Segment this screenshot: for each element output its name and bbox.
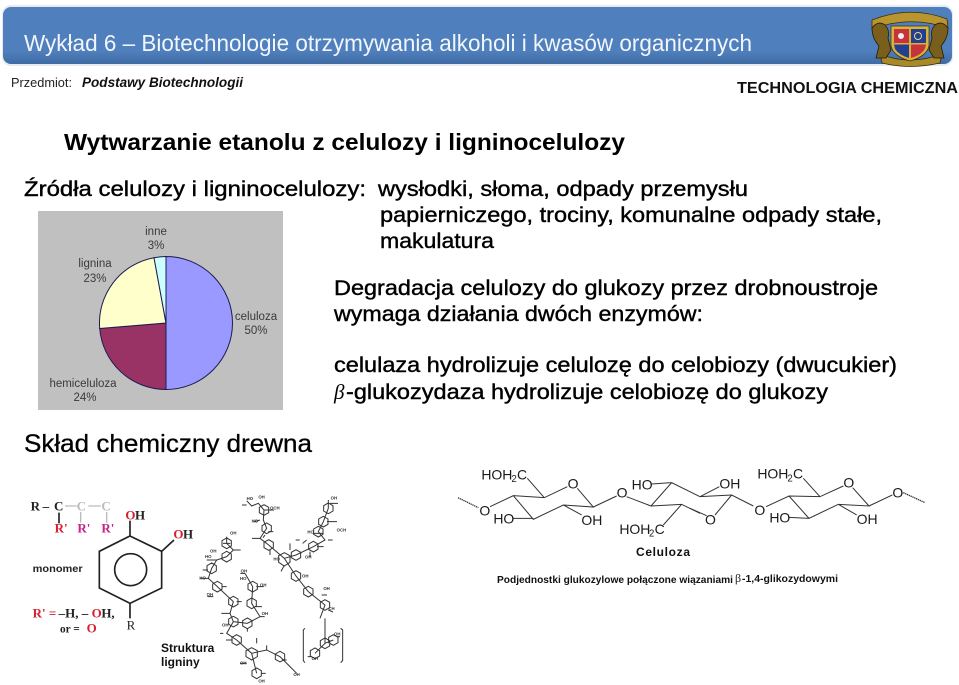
diagram: cellulose chain left part: O (617, 485, 628, 501)
text block: degradation of cellulose (333, 277, 878, 326)
lignin substituent labels: CH (328, 606, 335, 611)
lignin substituent labels: OH (258, 495, 265, 500)
lignin substituent labels: OH (293, 672, 300, 677)
pie labels (49, 226, 278, 404)
lignin substituent labels (199, 495, 346, 684)
diagram label: lignin structure: Struktura (161, 641, 215, 655)
lignin substituent labels: OH (260, 583, 266, 588)
diagram: cellulose chain right part: O (892, 484, 903, 500)
diagram: lignin monomer: R' = (33, 606, 56, 621)
text block: degradation of cellulose: wymaga działania dwóch enzymów: (333, 303, 703, 326)
diagram: lignin monomer: R' (55, 521, 68, 536)
diagram: lignin monomer: H, (101, 606, 115, 621)
diagram: lignin monomer: H (135, 507, 145, 522)
icon: university crest (872, 12, 948, 66)
text block: enzymes: -glukozydaza hydrolizuje celobiozę do glukozy (346, 381, 829, 404)
lignin substituent labels: OH (258, 679, 265, 684)
pie labels: 23% (83, 273, 107, 285)
diagram: cellulose chain left part: OH (581, 512, 602, 528)
diagram: cellulose chain left part: C (517, 466, 527, 482)
subject line (11, 75, 243, 90)
lignin substituent labels: OH (331, 495, 337, 500)
pie labels: hemiceluloza (49, 378, 117, 390)
pie chart caption: Skład chemiczny drewna (24, 430, 312, 458)
text block: degradation of cellulose: Degradacja celulozy do glukozy przez drobnoustroje (334, 277, 878, 300)
diagram: lignin monomer: C (54, 499, 63, 514)
diagram: cellulose chain left part: O (568, 476, 579, 492)
pie labels: celuloza (235, 311, 278, 323)
diagram: cellulose chain right part (690, 466, 925, 527)
diagram: cellulose chain right part: C (793, 466, 803, 482)
text block: enzymes: celulaza hydrolizuje celulozę do celobiozy (dwucukier) (334, 354, 897, 377)
diagram: cellulose chain left part: HOH (481, 466, 512, 482)
pie labels: 50% (244, 325, 268, 337)
diagram: lignin monomer (31, 499, 193, 636)
lignin substituent labels: OCH (270, 505, 280, 510)
diagram label: cellulose: Celuloza (636, 545, 690, 559)
diagram: lignin monomer: monomer (33, 564, 83, 575)
lignin substituent labels: HO (205, 554, 212, 559)
lignin substituent labels: OH (240, 660, 246, 665)
lignin substituent labels: HO (247, 496, 254, 501)
diagram: cellulose chain left part: HO (632, 476, 653, 492)
text block: sources of cellulose: makulatura (380, 230, 494, 253)
subject line: Podstawy Biotechnologii (82, 75, 243, 90)
slice: lignina 23% (99, 258, 166, 328)
lignin substituent labels: OH (262, 611, 268, 616)
pie labels: lignina (78, 258, 112, 270)
text block: sources of cellulose (24, 178, 882, 253)
diagram: lignin monomer: –H, – (58, 606, 89, 621)
diagram caption: glucosyl subunits: -1,4-glikozydowymi (742, 573, 838, 585)
text block: enzymes: β (333, 380, 345, 404)
diagram: lignin monomer: R' (101, 521, 114, 536)
diagram: cellulose chain right part: O (843, 475, 854, 491)
lignin substituent labels: HO (199, 575, 206, 580)
diagram: lignin monomer: O (173, 526, 183, 541)
lignin substituent labels: HO (252, 519, 259, 524)
diagram label: lignin structure (161, 641, 215, 669)
diagram caption: glucosyl subunits: β (735, 571, 741, 585)
lignin substituent labels: OH (334, 632, 340, 637)
diagram: lignin monomer: R (127, 617, 136, 632)
diagram: lignin monomer: H (183, 526, 193, 541)
diagram: cellulose chain left part: O (479, 503, 490, 519)
diagram: cellulose chain left part: 2 (511, 474, 517, 485)
diagram: cellulose chain left part: 2 (649, 529, 654, 540)
diagram: cellulose chain right part: 2 (787, 473, 793, 484)
lignin substituent labels: OH (230, 531, 236, 536)
diagram: lignin monomer: R (31, 499, 41, 514)
diagram: lignin polymer structure (199, 495, 346, 684)
diagram: cellulose chain right part: OH (719, 475, 740, 491)
slice: hemiceluloza 24% (100, 323, 166, 390)
lignin substituent labels: HO (307, 529, 314, 534)
text block: sources of cellulose: Źródła celulozy i ligninocelulozy: (24, 178, 366, 201)
diagram: lignin monomer: – (42, 499, 50, 514)
diagram: lignin monomer: C (77, 499, 86, 514)
diagram: lignin monomer: O (92, 606, 102, 621)
lignin substituent labels: OH (207, 592, 213, 597)
diagram: cellulose chain left part: C (655, 521, 665, 537)
subject line: Przedmiot: (11, 76, 72, 90)
diagram label: lignin structure: ligniny (161, 655, 200, 669)
diagram: lignin monomer: C (101, 499, 111, 514)
lignin substituent labels: OH (222, 623, 228, 628)
header title: Wykład 6 – Biotechnologie otrzymywania alkoholi i kwasów organicznych (24, 30, 752, 56)
pie labels: 24% (73, 392, 97, 404)
text block: sources of cellulose: papierniczego, trociny, komunalne odpady stałe, (380, 204, 882, 227)
lignin substituent labels: OH (305, 554, 311, 559)
diagram: cellulose chain right part: OH (857, 511, 878, 527)
lignin substituent labels: HO (240, 576, 247, 581)
text block: sources of cellulose: wysłodki, słoma, odpady przemysłu (377, 178, 748, 201)
slice: inne 3% (154, 256, 166, 323)
department label: TECHNOLOGIA CHEMICZNA (737, 80, 958, 97)
lignin substituent labels: OH (323, 586, 330, 591)
diagram: cellulose chain right part: O (754, 502, 765, 518)
diagram: cellulose chain right part: HOH (757, 466, 788, 482)
diagram: cellulose chain left part: HO (493, 510, 514, 526)
text block: enzymes (333, 354, 897, 404)
diagram: cellulose chain left part: HOH (619, 521, 650, 537)
pie labels: 3% (148, 240, 164, 252)
header banner (2, 5, 953, 66)
diagram: cellulose chain left part (458, 466, 700, 540)
diagram: cellulose chain right part: O (705, 511, 716, 527)
lignin substituent labels: OH (241, 569, 247, 574)
slice: celuloza 50% (166, 256, 232, 390)
lignin substituent labels: HO (273, 557, 280, 562)
diagram caption: glucosyl subunits (497, 571, 838, 586)
pie chart: wood composition (38, 211, 283, 410)
lignin substituent labels: OH (312, 656, 318, 661)
diagram: lignin monomer: O (125, 507, 135, 522)
lignin substituent labels: OH (302, 573, 308, 578)
pie labels: inne (145, 226, 167, 238)
diagram: lignin monomer: or = (60, 624, 80, 636)
diagram caption: glucosyl subunits: Podjednostki glukozylowe połączone wiązaniami (497, 574, 733, 586)
main heading: Wytwarzanie etanolu z celulozy i ligninocelulozy (64, 129, 625, 155)
diagram: cellulose chain right part: HO (769, 509, 790, 525)
lignin substituent labels: OH (210, 549, 216, 554)
diagram: lignin monomer: O (87, 621, 97, 636)
lignin substituent labels: OCH (337, 528, 346, 533)
diagram: lignin monomer: R' (77, 521, 90, 536)
